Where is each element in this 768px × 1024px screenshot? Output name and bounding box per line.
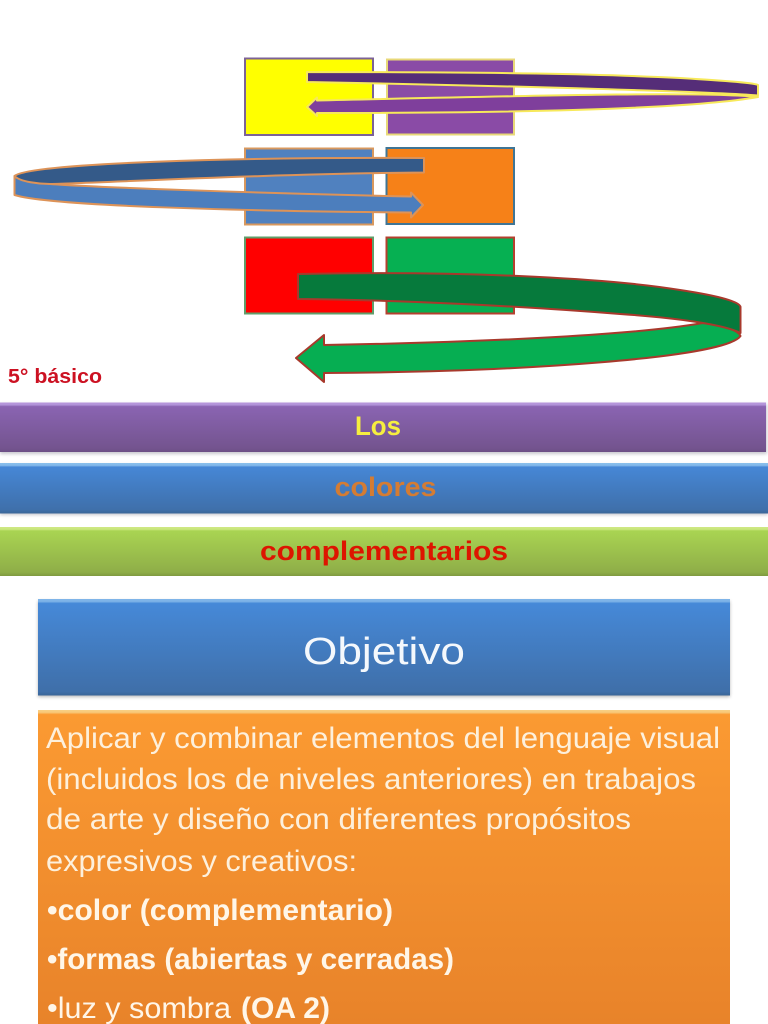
arrow: blue to orange and back [14, 158, 424, 218]
banner: complementarios [0, 527, 768, 576]
bullet list: •formas (abiertas y cerradas) [47, 943, 454, 976]
bullet list: •color (complementario) [47, 894, 393, 927]
arrow: yellow to purple and back [307, 72, 758, 116]
description paragraph: de arte y diseño con diferentes propósitos [46, 803, 631, 836]
banner: colores [0, 463, 768, 515]
bullet list [47, 894, 454, 1024]
panel: Objetivo heading [38, 599, 730, 697]
grade label: 5° básico [8, 366, 102, 388]
description paragraph: (incluidos los de niveles anteriores) en trabajos [46, 763, 696, 796]
banner: Los [0, 402, 767, 454]
banner: colores: colores [334, 472, 436, 502]
description paragraph: expresivos y creativos: [46, 845, 357, 878]
description paragraph [46, 722, 720, 878]
panel: Objetivo heading: Objetivo [303, 631, 465, 673]
arrow: red to green and back [296, 273, 740, 382]
panel: objective text [38, 710, 730, 1024]
colour squares: complementary pairs [245, 58, 514, 314]
banner: complementarios: complementarios [260, 536, 508, 566]
banner: Los: Los [355, 411, 401, 441]
description paragraph: Aplicar y combinar elementos del lenguaje visual [46, 722, 720, 755]
